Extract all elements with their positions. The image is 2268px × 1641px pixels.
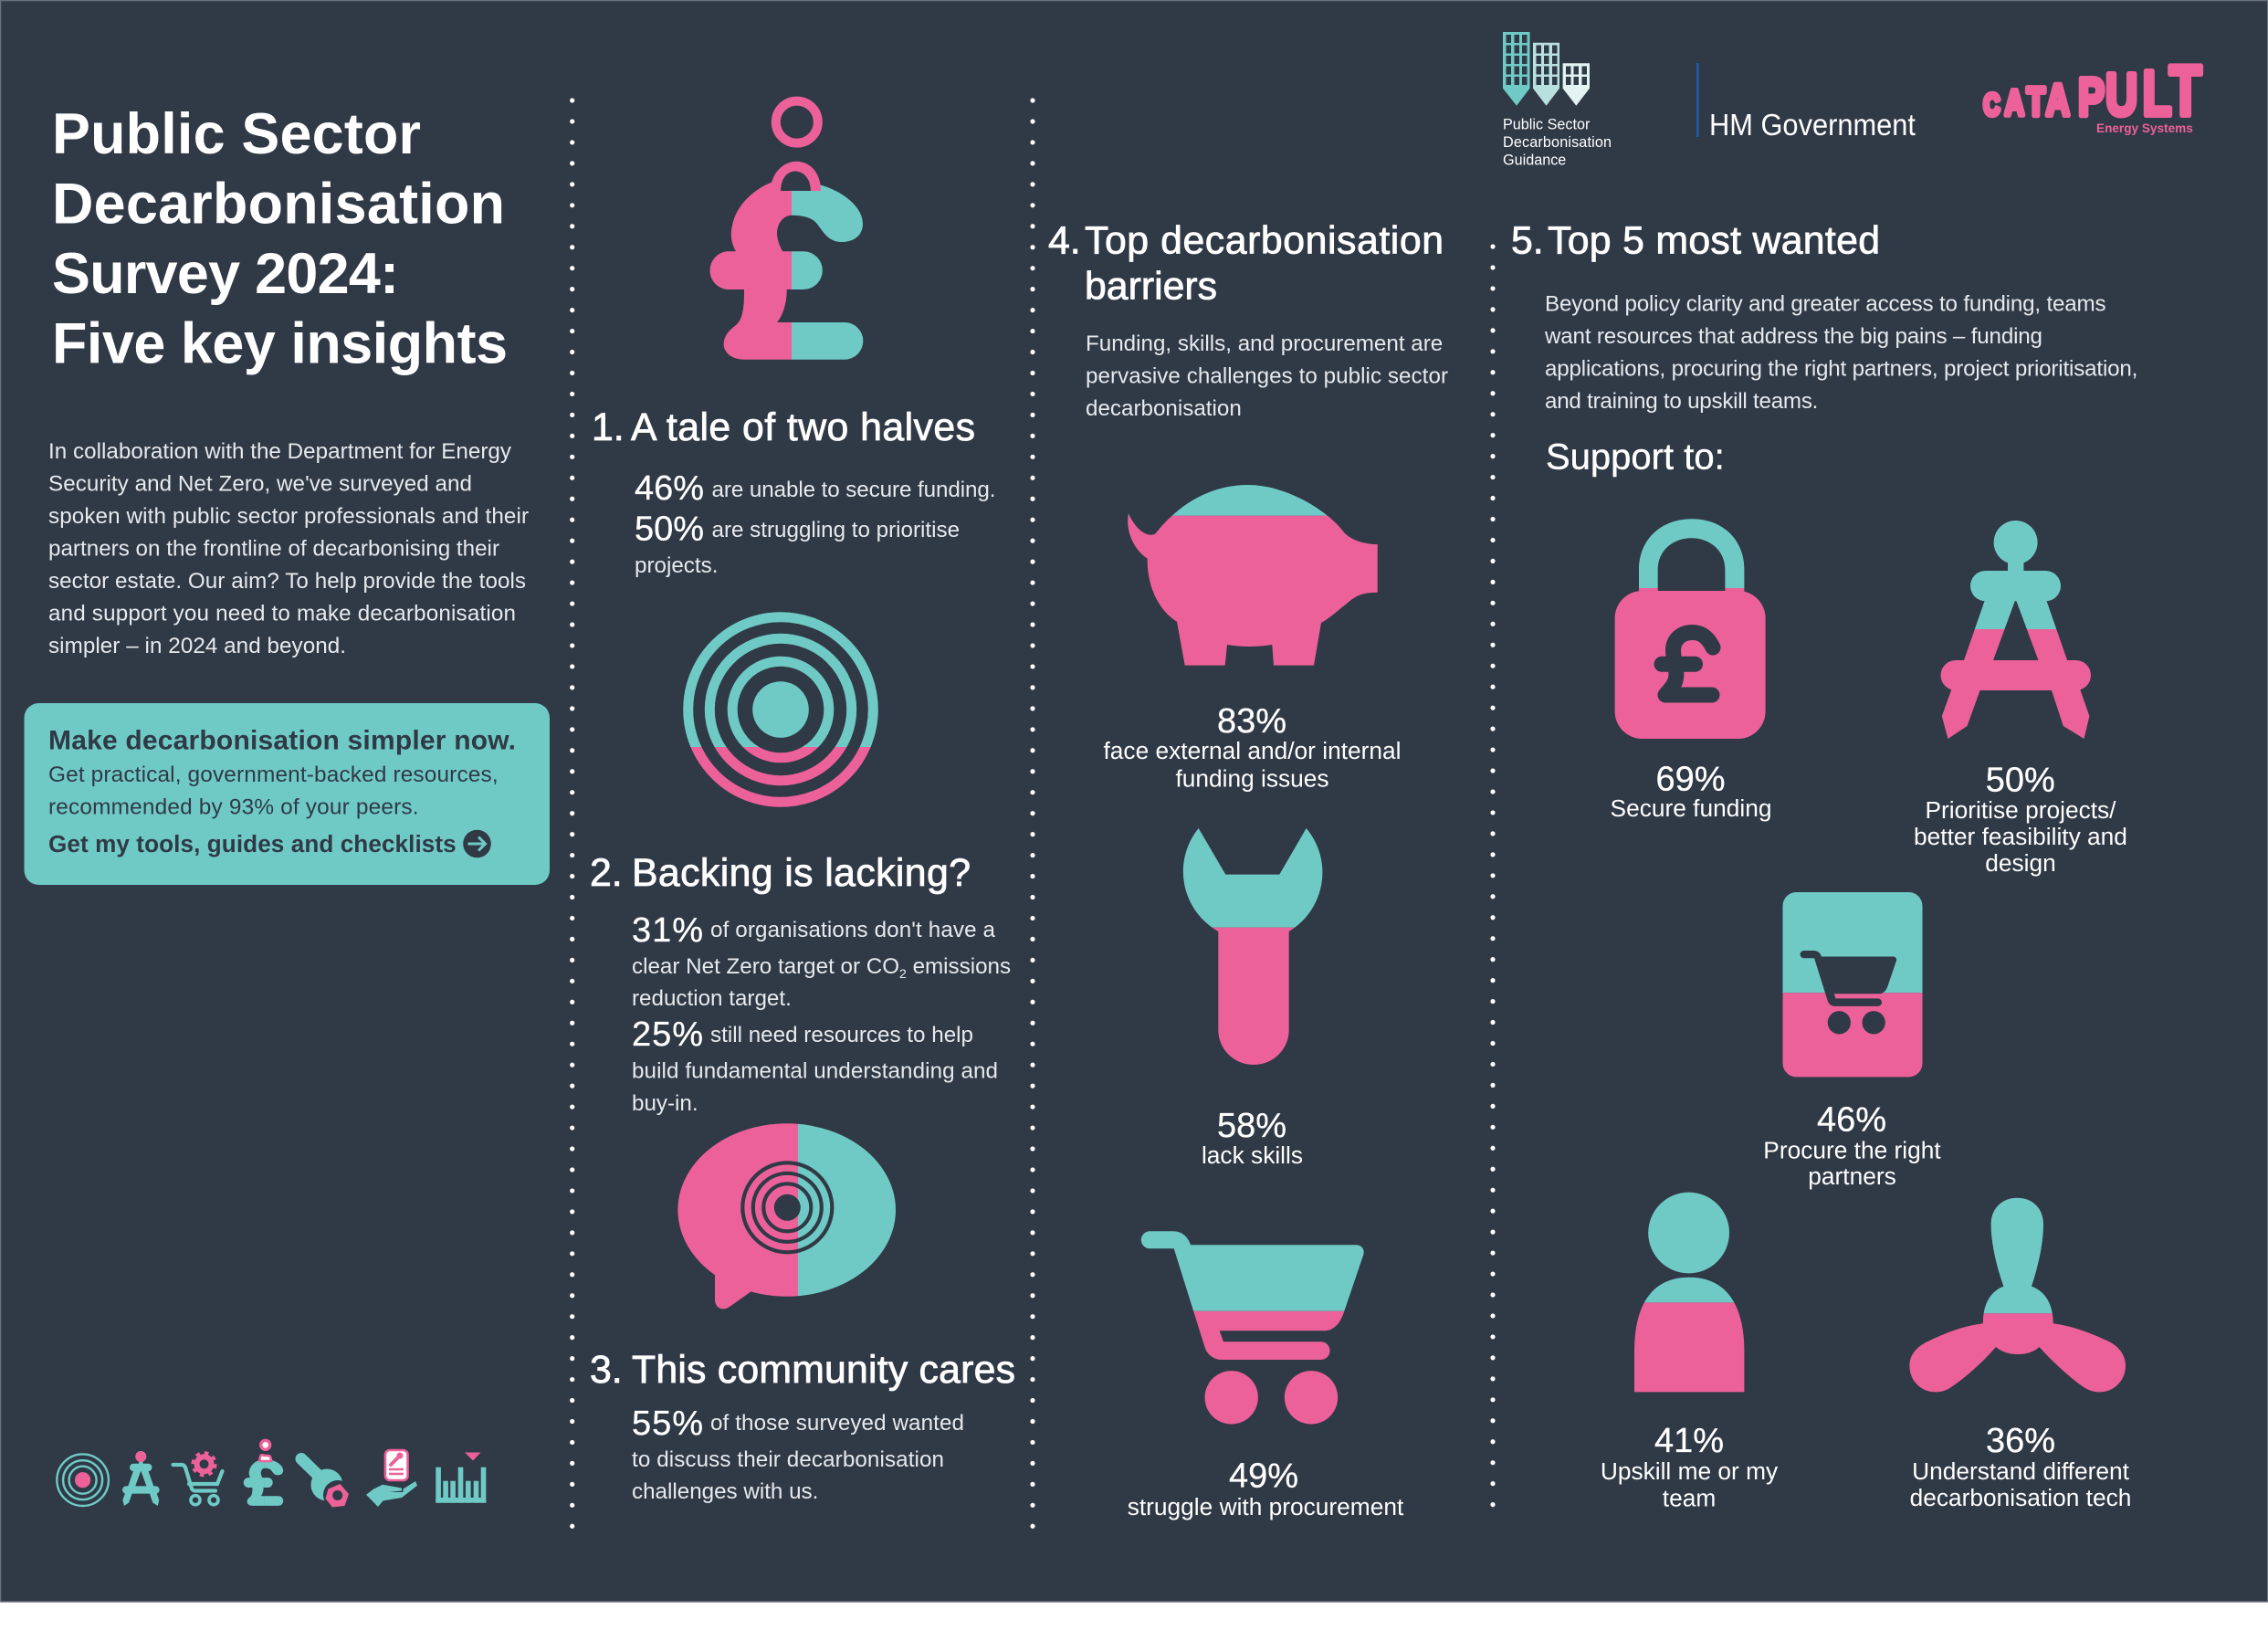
title: Public Sector <box>52 102 421 166</box>
stat: 41 percent: team <box>1663 1485 1716 1512</box>
logo: public sector decarbonisation guidance: Guidance <box>1503 152 1566 168</box>
stat: 41 percent <box>1601 1422 1779 1512</box>
stat: 46 percent: 46% <box>1817 1101 1886 1140</box>
panel: 2 backing is lacking: 2. <box>590 851 623 895</box>
stat: 49 percent <box>1128 1457 1404 1520</box>
panel: 1 a tale of two halves: A tale of two halves <box>631 405 975 449</box>
panel: 1 a tale of two halves <box>592 405 995 578</box>
panel: 1 a tale of two halves: are struggling to prioritise <box>712 518 960 542</box>
stat: 50 percent: Prioritise projects/ <box>1926 796 2116 824</box>
stat: 46 percent <box>1763 1101 1941 1190</box>
logo: Catapult Energy Systems: P <box>2078 68 2105 126</box>
panel: 2 backing is lacking: 31% <box>632 911 703 950</box>
intro text: Security and Net Zero, we've surveyed and <box>48 471 472 497</box>
logo: Catapult Energy Systems: U <box>2105 62 2137 129</box>
panel: 1 a tale of two halves: 50% <box>635 510 704 548</box>
panel: 4 top decarbonisation barriers heading: pervasive challenges to public sector <box>1086 363 1448 389</box>
panel: 2 backing is lacking: 2 <box>899 966 907 981</box>
logo: HM Government: HM Government <box>1709 109 1916 142</box>
icon row <box>57 1440 486 1510</box>
panel: 2 backing is lacking: 25% <box>632 1015 703 1054</box>
logo: public sector decarbonisation guidance: Public Sector <box>1503 117 1591 133</box>
panel: 4 top decarbonisation barriers heading: Top decarbonisation <box>1085 219 1444 263</box>
panel: 5 top 5 most wanted heading: Top 5 most wanted <box>1548 219 1880 263</box>
callout: make decarbonisation simpler: Get practical, government-backed resources, <box>48 763 499 787</box>
stat: 36 percent: decarbonisation tech <box>1910 1484 2131 1511</box>
intro text: partners on the frontline of decarbonising their <box>48 537 499 561</box>
icon: small compass <box>122 1451 160 1506</box>
icon: small target <box>57 1454 109 1506</box>
callout: make decarbonisation simpler: Make decarbonisation simpler now. <box>48 725 516 756</box>
intro text: and support you need to make decarbonisation <box>48 601 516 626</box>
panel: 5 top 5 most wanted heading: Beyond policy clarity and greater access to funding, teams <box>1545 292 2106 316</box>
panel: 2 backing is lacking: still need resources to help <box>710 1023 973 1047</box>
stat: 58 percent <box>1202 1107 1303 1169</box>
logo: public sector decarbonisation guidance <box>1503 32 1612 168</box>
panel: 4 top decarbonisation barriers heading: barriers <box>1085 265 1217 309</box>
icon: shopping cart <box>1141 1231 1364 1425</box>
stat: 41 percent: Upskill me or my <box>1601 1457 1779 1485</box>
title: Survey 2024: <box>52 242 399 306</box>
panel: 2 backing is lacking: reduction target. <box>632 986 792 1011</box>
logo: public sector decarbonisation guidance: Decarbonisation <box>1503 134 1612 151</box>
stat: 83 percent: funding issues <box>1175 765 1329 793</box>
title: Decarbonisation <box>52 172 505 236</box>
logo: Catapult Energy Systems: C <box>1983 89 2000 122</box>
panel: 1 a tale of two halves: are unable to secure funding. <box>712 478 995 502</box>
stat: 36 percent <box>1910 1422 2131 1511</box>
icon: compass <box>1941 521 2091 739</box>
logo: Catapult Energy Systems <box>1983 51 2201 135</box>
logo: Catapult Energy Systems: A <box>2005 84 2024 123</box>
stat: 41 percent: 41% <box>1654 1422 1724 1460</box>
panel: 1 a tale of two halves: 1. <box>592 405 625 449</box>
callout: make decarbonisation simpler: Get my tools, guides and checklists <box>48 830 457 857</box>
icon: small pound <box>244 1440 283 1506</box>
panel: 4 top decarbonisation barriers heading: Funding, skills, and procurement are <box>1086 331 1443 356</box>
stat: 50 percent <box>1914 762 2127 877</box>
panel: 5 top 5 most wanted heading: and training to upskill teams. <box>1545 389 1818 414</box>
icon: small wrench and nut <box>301 1459 352 1510</box>
logo: Catapult Energy Systems: T <box>2027 80 2045 124</box>
panel: 1 a tale of two halves: projects. <box>635 553 718 578</box>
panel: 2 backing is lacking <box>590 851 1011 1116</box>
panel: 5 top 5 most wanted heading: Support to: <box>1546 437 1725 477</box>
icon: wrench <box>1183 828 1322 1065</box>
panel: 3 this community cares: to discuss their decarbonisation <box>632 1447 944 1472</box>
icon: speech bubble <box>677 1123 896 1309</box>
intro text: In collaboration with the Department for Energy <box>48 439 512 464</box>
callout: make decarbonisation simpler: recommended by 93% of your peers. <box>48 794 418 820</box>
icon: piggy bank <box>1128 485 1378 666</box>
stat: 49 percent: 49% <box>1229 1457 1298 1496</box>
panel: 1 a tale of two halves: 46% <box>635 469 704 508</box>
stat: 46 percent: partners <box>1808 1162 1896 1190</box>
panel: 4 top decarbonisation barriers heading: 4. <box>1048 219 1081 263</box>
stat: 58 percent: lack skills <box>1202 1141 1303 1169</box>
stat: 58 percent: 58% <box>1217 1107 1286 1145</box>
panel: 3 this community cares: of those surveyed wanted <box>710 1411 964 1436</box>
stat: 36 percent: 36% <box>1986 1422 2055 1460</box>
panel: 3 this community cares: 55% <box>632 1404 703 1443</box>
stat: 36 percent: Understand different <box>1912 1457 2130 1485</box>
stat: 50 percent: better feasibility and <box>1914 823 2127 850</box>
panel: 2 backing is lacking: buy-in. <box>632 1091 698 1116</box>
panel: 2 backing is lacking: clear Net Zero target or CO <box>632 954 899 979</box>
panel: 5 top 5 most wanted heading <box>1511 219 2137 477</box>
logo: Catapult Energy Systems: A <box>2046 76 2070 124</box>
panel: 5 top 5 most wanted heading: 5. <box>1511 219 1544 263</box>
panel: 3 this community cares: 3. <box>590 1348 623 1392</box>
stat: 83 percent: 83% <box>1217 702 1286 741</box>
icon: large pound with ring <box>710 101 863 360</box>
icon: person <box>1634 1193 1744 1392</box>
stat: 49 percent: struggle with procurement <box>1128 1493 1404 1520</box>
panel: 2 backing is lacking: Backing is lacking? <box>632 851 971 895</box>
panel: 3 this community cares: challenges with us. <box>632 1479 818 1504</box>
title: Five key insights <box>52 312 508 376</box>
panel: 5 top 5 most wanted heading: applications, procuring the right partners, project prioritisation, <box>1545 356 2137 382</box>
panel: 2 backing is lacking: of organisations don't have a <box>710 918 996 942</box>
icon: card with cart <box>1782 892 1923 1077</box>
stat: 46 percent: Procure the right <box>1763 1136 1941 1163</box>
stat: 69 percent: 69% <box>1655 760 1726 798</box>
logo: Catapult Energy Systems: Energy Systems <box>2096 121 2193 135</box>
title <box>52 102 508 376</box>
panel: 2 backing is lacking: emissions <box>907 954 1011 979</box>
panel: 3 this community cares: This community cares <box>632 1348 1015 1392</box>
icon: small hand holding card <box>366 1450 417 1507</box>
logo: Catapult Energy Systems: T <box>2169 51 2201 131</box>
icon: small cart with gear <box>173 1453 223 1505</box>
intro text: sector estate. Our aim? To help provide the tools <box>48 569 526 594</box>
stat: 83 percent <box>1103 702 1401 793</box>
stat: 83 percent: face external and/or internal <box>1103 737 1401 764</box>
panel: 5 top 5 most wanted heading: want resources that address the big pains – funding <box>1544 324 2042 349</box>
panel: 3 this community cares <box>590 1348 1015 1504</box>
panel: 2 backing is lacking: build fundamental understanding and <box>632 1059 998 1083</box>
intro text: simpler – in 2024 and beyond. <box>48 634 346 658</box>
icon: fan blades <box>1909 1198 2126 1392</box>
panel: 4 top decarbonisation barriers heading: decarbonisation <box>1086 396 1242 421</box>
callout: make decarbonisation simpler <box>24 703 550 885</box>
intro text <box>48 439 529 658</box>
icon: small bar chart <box>436 1452 486 1503</box>
logo: Catapult Energy Systems: L <box>2143 58 2172 130</box>
stat: 50 percent: design <box>1985 849 2056 877</box>
stat: 69 percent: Secure funding <box>1611 794 1771 822</box>
panel: 4 top decarbonisation barriers heading <box>1048 219 1448 421</box>
icon: target <box>688 617 873 802</box>
icon: padlock with pound <box>1615 519 1766 739</box>
icon: arrow button <box>463 830 491 857</box>
stat: 50 percent: 50% <box>1986 762 2055 800</box>
intro text: spoken with public sector professionals and their <box>48 504 529 529</box>
stat: 69 percent <box>1611 760 1771 822</box>
